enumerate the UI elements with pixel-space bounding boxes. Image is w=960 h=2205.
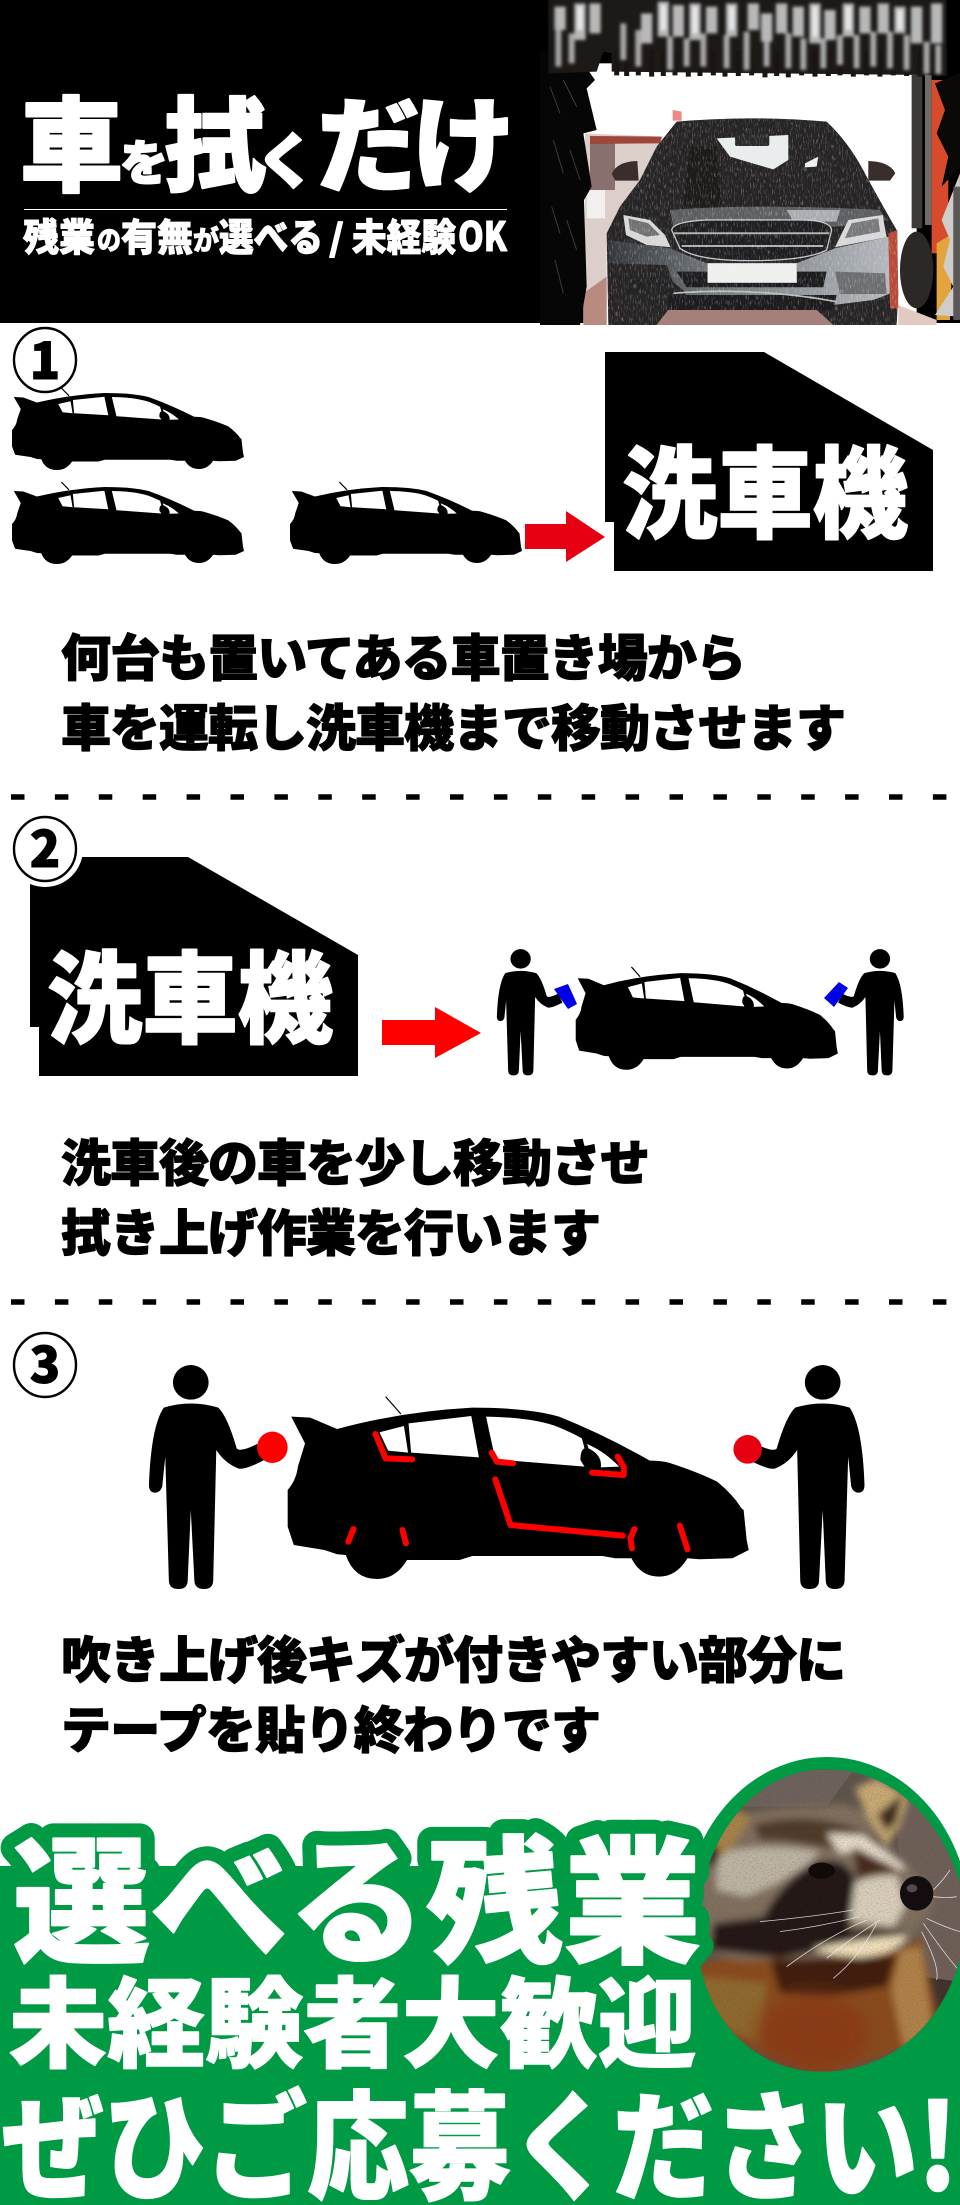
title: だ [317, 64, 420, 213]
raccoon body [693, 1937, 943, 2077]
workers taping car [149, 1365, 864, 1589]
step 3 description: テープを貼り終わりです [61, 1691, 601, 1763]
subtitle: が [193, 219, 219, 258]
step 1 description: 何台も置いてある車置き場から [61, 619, 746, 691]
car wash machine block: 洗車機 [622, 414, 908, 559]
panel: green call to action [0, 1750, 960, 2205]
subtitle: 未経験 [352, 207, 456, 262]
raccoon whiskers [760, 1870, 960, 1980]
icon: blue cloths [554, 982, 848, 1009]
raccoon nose and eye [808, 1863, 933, 1911]
step number 2 [7, 810, 83, 887]
red tape marks [348, 1434, 688, 1549]
car wash machine block: 洗車機 [47, 919, 333, 1064]
step 2 description [61, 1124, 650, 1266]
raccoon head [698, 1804, 933, 1960]
dashed divider 1 [11, 794, 950, 800]
photo detail: left brush [540, 50, 597, 325]
title: 車 [20, 64, 123, 213]
car wash machine block [605, 352, 933, 571]
subtitle [23, 205, 508, 263]
dashed divider 2 [11, 1299, 950, 1305]
step 3 description: 吹き上げ後キズが付きやすい部分に [61, 1621, 846, 1693]
title [20, 64, 515, 213]
subtitle: 残業 [23, 207, 95, 262]
photo detail: wet car [607, 117, 900, 325]
step 1 description [61, 619, 846, 761]
step number 3: 3 [30, 1326, 60, 1398]
subtitle: 有無 [121, 207, 193, 262]
raccoon ears [855, 1778, 909, 1845]
headline: choose overtime: 選べる残業 [13, 1794, 701, 1992]
gradient fade into black [465, 0, 560, 323]
step number 2: 2 [30, 810, 60, 882]
photo detail: post and right brush [900, 73, 960, 320]
subtitle: 選べる [219, 207, 323, 262]
panel: step 3 [14, 1326, 864, 1763]
step 1 description: 車を運転し洗車機まで移動させます [61, 689, 846, 761]
subtitle: の [97, 219, 121, 258]
car wash machine block [30, 857, 358, 1076]
arrow [525, 511, 605, 562]
subtitle: OK [458, 205, 508, 263]
arrow [382, 1007, 481, 1058]
title: を [120, 124, 168, 194]
step 3 description [61, 1621, 846, 1763]
step number 1 [14, 322, 76, 394]
step 2 description: 拭き上げ作業を行います [61, 1194, 601, 1266]
photo: car in automatic car wash [540, 0, 960, 325]
subheading: beginners welcome: 未経験者大歓迎 [9, 1946, 696, 2088]
step 2 description: 洗車後の車を少し移動させ [61, 1124, 650, 1196]
panel: header banner [0, 0, 960, 325]
title: く [256, 114, 316, 201]
title: 拭 [164, 64, 267, 213]
worker right [733, 1365, 864, 1589]
photo: raccoon dog [700, 1770, 960, 2072]
car silhouettes waiting [12, 388, 522, 564]
workers wiping car [497, 949, 904, 1075]
panel: step 1 [12, 322, 933, 761]
step number 1: 1 [30, 322, 60, 394]
worker left [149, 1365, 288, 1589]
panel: step 2 [7, 810, 904, 1266]
title: け [412, 64, 515, 213]
subtitle: / [329, 210, 344, 262]
title divider [24, 209, 507, 210]
white overlay of headline: 選べる残業 [13, 1794, 701, 1992]
photo detail: background building [583, 110, 937, 325]
photo detail: top roller brush [548, 0, 947, 77]
step number 3 [14, 1326, 76, 1398]
